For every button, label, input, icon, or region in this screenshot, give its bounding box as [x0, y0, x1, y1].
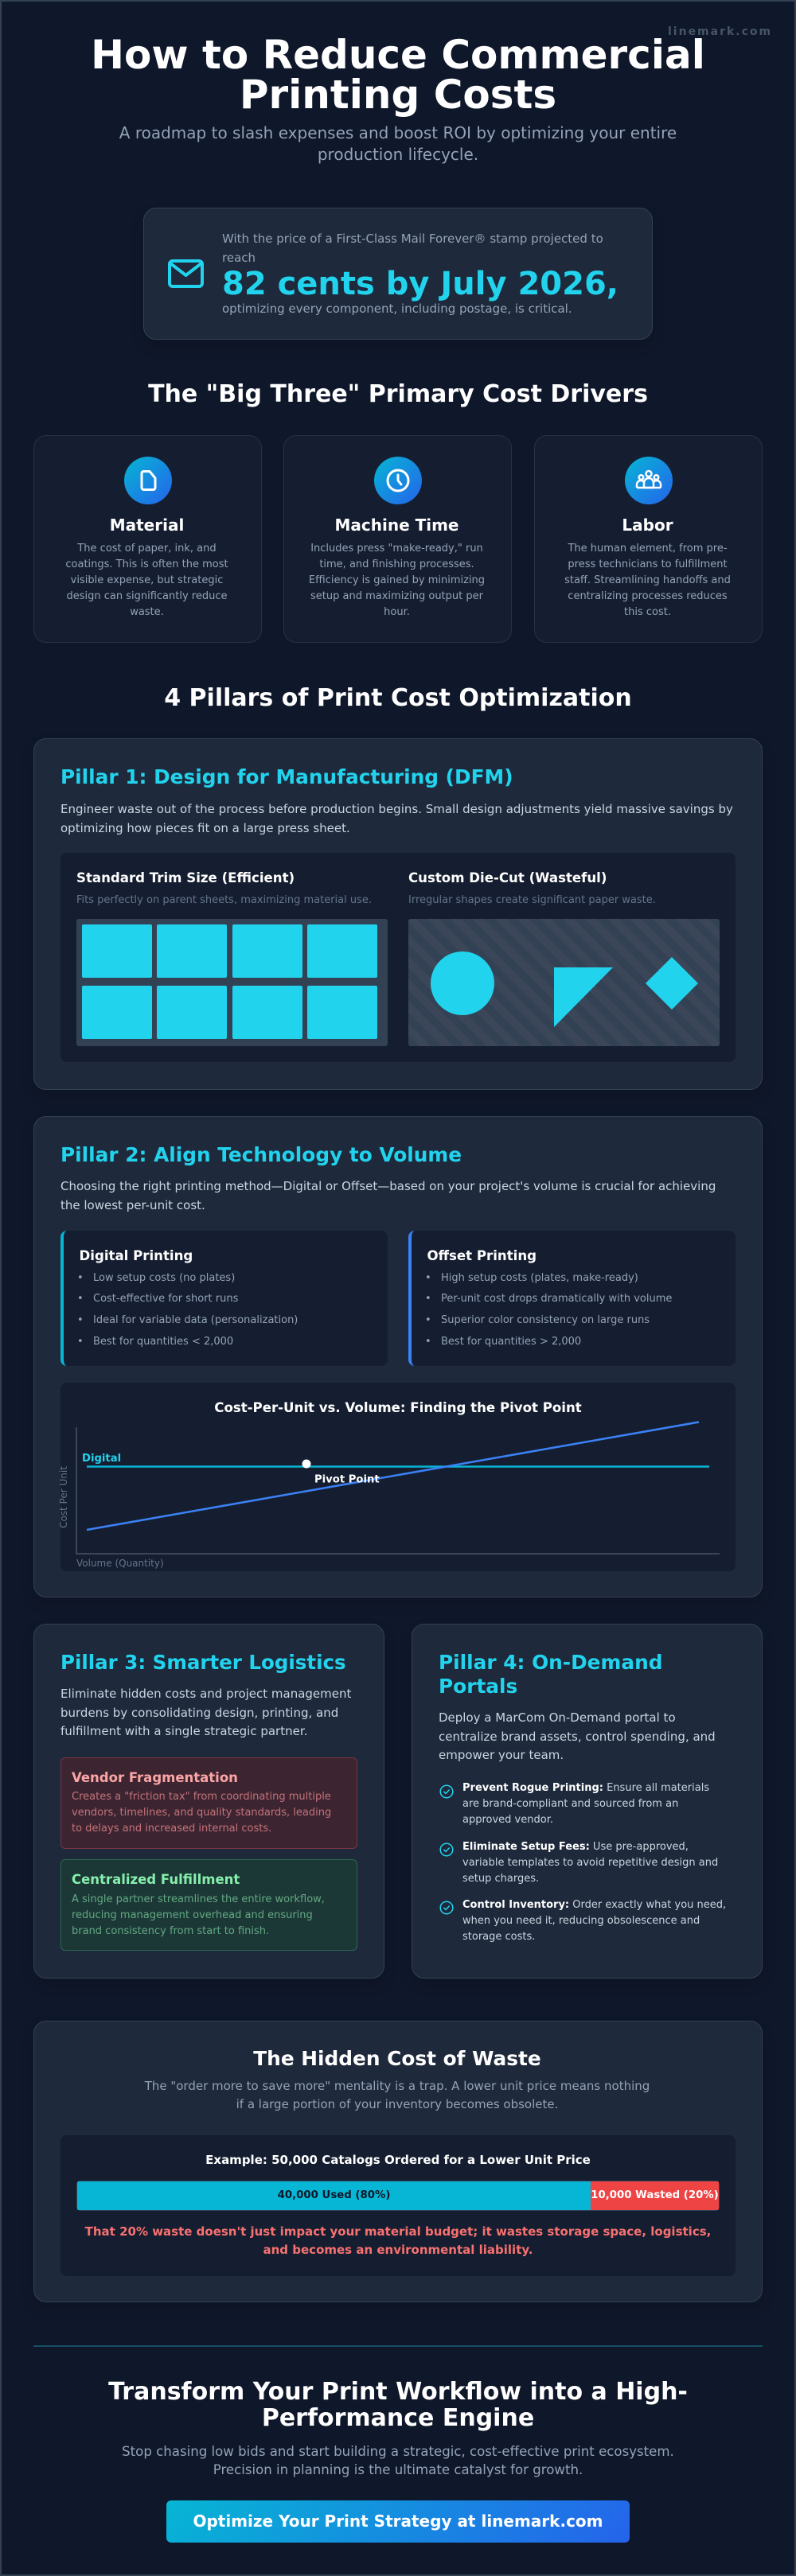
card text: press technicians to fulfillment [568, 558, 728, 570]
efficient press sheet [76, 919, 388, 1046]
digital bullets: • [77, 1336, 84, 1348]
card text: centralizing processes reduces [568, 590, 728, 602]
waste note: and becomes an environmental liability. [263, 2242, 533, 2256]
pillar 2 heading: Pillar 2: Align Technology to Volume [60, 1143, 462, 1166]
pillar 3 text [60, 1687, 352, 1738]
benefit: setup fees: Eliminate Setup Fees: Use pre-approved, [462, 1841, 689, 1853]
vendor text: vendors, timelines, and quality standards, leading [72, 1807, 331, 1819]
pillar 2 text: Choosing the right printing method—Digital or Offset—based on your project's volume is crucial for achieving [60, 1179, 716, 1193]
closing heading: Performance Engine [262, 2404, 534, 2431]
example title: Example: 50,000 Catalogs Ordered for a Lower Unit Price [205, 2153, 591, 2167]
vendor heading: Vendor Fragmentation [72, 1770, 238, 1785]
digital bullets: • [77, 1293, 84, 1305]
closing text: Precision in planning is the ultimate catalyst for growth. [213, 2462, 583, 2477]
benefit: rogue printing: Prevent Rogue Printing: Ensure all materials [462, 1782, 709, 1794]
offset list [441, 1272, 672, 1348]
card text: hour. [384, 606, 410, 618]
benefit: inventory [462, 1899, 726, 1943]
digital list [93, 1272, 298, 1348]
digital heading: Digital Printing [80, 1248, 193, 1263]
closing text: Stop chasing low bids and start building a strategic, cost-effective print ecosystem. [122, 2444, 674, 2459]
pillar 4 heading: Pillar 4: On-Demand [439, 1651, 662, 1674]
vendor text: to delays and increased internal costs. [72, 1823, 271, 1835]
fulfillment text [72, 1893, 325, 1937]
card title: Labor [622, 516, 673, 535]
pivot marker [302, 1459, 310, 1469]
call to action button [166, 2500, 630, 2543]
y axis label: Cost Per Unit [58, 1466, 69, 1528]
wasted segment: 10,000 Wasted (20%) [591, 2189, 719, 2201]
offset bullets [425, 1272, 431, 1348]
benefit: inventory: Control Inventory: Order exactly what you need, [462, 1899, 726, 1911]
benefit: inventory: when you need it, reducing obsolescence and [462, 1915, 700, 1927]
offset heading: Offset Printing [427, 1248, 537, 1263]
benefit: setup fees [462, 1841, 718, 1885]
fulfillment text: A single partner streamlines the entire workflow, [72, 1893, 325, 1905]
card: machine time [283, 435, 512, 643]
icon: check [439, 1843, 454, 1857]
pillar 3 text: fulfillment with a single strategic partner. [60, 1724, 307, 1738]
benefit: rogue printing: approved vendor. [462, 1814, 553, 1826]
heading: big three: The "Big Three" Primary Cost Drivers [148, 380, 648, 408]
wasteful press sheet [408, 919, 720, 1046]
waste note [84, 2224, 711, 2256]
card text: setup and maximizing output per [310, 590, 483, 602]
offset bullets: • [425, 1293, 431, 1305]
benefit: rogue printing: are brand-compliant and sourced from an [462, 1798, 678, 1810]
pillar 3 heading: Pillar 3: Smarter Logistics [60, 1651, 346, 1674]
offset bullets: • [425, 1272, 431, 1284]
fulfillment text: brand consistency from start to finish. [72, 1925, 269, 1937]
digital list: Best for quantities < 2,000 [93, 1336, 233, 1348]
chart title: Cost-Per-Unit vs. Volume: Finding the Pivot Point [214, 1400, 582, 1415]
icon: check [439, 1901, 454, 1914]
wasteful caption: Irregular shapes create significant paper waste. [408, 894, 656, 906]
offset list: Best for quantities > 2,000 [441, 1336, 581, 1348]
title: How to Reduce Commercial [91, 32, 705, 78]
waste text: The "order more to save more" mentality is a trap. A lower unit price means nothing [145, 2078, 650, 2092]
watermark: linemark.com [668, 25, 772, 38]
pillar 4 text: empower your team. [439, 1748, 564, 1762]
subtitle: production lifecycle. [318, 145, 478, 164]
panel: catalog example [60, 2135, 736, 2276]
pillar 1 heading: Pillar 1: Design for Manufacturing (DFM) [60, 765, 513, 788]
callout highlight: 82 cents by July 2026, [222, 266, 618, 302]
line chart: pivot point [60, 1383, 736, 1571]
card text: design can significantly reduce [66, 590, 228, 602]
panel: pillar 4 [412, 1624, 763, 1979]
pivot label: Pivot Point [314, 1473, 380, 1486]
waste text: if a large portion of your inventory becomes obsolete. [236, 2097, 558, 2111]
digital bullets: • [77, 1272, 84, 1284]
icon: check [439, 1785, 454, 1798]
card title: Machine Time [334, 516, 458, 535]
call to action button: Optimize Your Print Strategy at linemark.com [193, 2512, 603, 2531]
axes [76, 1427, 720, 1554]
callout lead text [222, 232, 603, 265]
card text: time, and finishing processes. [319, 558, 474, 570]
card text [309, 543, 485, 618]
panel: hidden cost of waste [33, 2021, 763, 2302]
offset bullets: • [425, 1314, 431, 1326]
closing text [122, 2444, 674, 2477]
card text: coatings. This is often the most [65, 558, 228, 570]
callout closing text: optimizing every component, including postage, is critical. [222, 302, 572, 316]
card text: staff. Streamlining handoffs and [564, 574, 731, 586]
benefit: setup fees: variable templates to avoid repetitive design and [462, 1857, 718, 1869]
pillar 4 heading: Portals [439, 1675, 517, 1698]
callout: vendor fragmentation [60, 1757, 357, 1849]
panel: offset printing [408, 1231, 736, 1366]
panel: digital printing [60, 1231, 388, 1366]
subtitle [119, 123, 677, 164]
title: Printing Costs [240, 72, 556, 118]
vendor text: Creates a "friction tax" from coordinating multiple [72, 1791, 331, 1803]
waste note: That 20% waste doesn't just impact your material budget; it wastes storage space, logistics, [85, 2224, 711, 2239]
card text [564, 543, 731, 618]
card text: The human element, from pre- [568, 543, 728, 555]
callout lead text: With the price of a First-Class Mail Forever® stamp projected to [222, 232, 603, 246]
pillar 3 text: Eliminate hidden costs and project management [60, 1687, 351, 1701]
card text [65, 543, 228, 618]
card text: waste. [130, 606, 164, 618]
waste heading: The Hidden Cost of Waste [253, 2047, 541, 2070]
pillar 3 text: burdens by consolidating design, printing, and [60, 1706, 338, 1720]
digital bullets: • [77, 1314, 84, 1326]
panel: pillar 2 [33, 1116, 763, 1597]
subtitle: A roadmap to slash expenses and boost ROI by optimizing your entire [119, 123, 677, 142]
panel: pillar 1 [33, 738, 763, 1090]
icon: people [624, 457, 672, 504]
divider [33, 2345, 763, 2347]
x axis label: Volume (Quantity) [76, 1558, 164, 1569]
card text: Efficiency is gained by minimizing [309, 574, 485, 586]
digital list: Cost-effective for short runs [93, 1293, 238, 1305]
card: labor [534, 435, 763, 643]
callout lead text: reach [222, 251, 256, 265]
offset list: Per-unit cost drops dramatically with volume [441, 1293, 672, 1305]
digital list: Low setup costs (no plates) [93, 1272, 235, 1284]
pillar 2 text: the lowest per-unit cost. [60, 1198, 205, 1212]
pillar 1 text: Engineer waste out of the process before production begins. Small design adjustments yield massive savings by [60, 802, 733, 816]
benefit: setup fees: setup charges. [462, 1873, 539, 1885]
wasted segment [591, 2181, 719, 2210]
pillar 4 heading [439, 1651, 662, 1698]
title [91, 32, 705, 118]
pillar 1 text [60, 802, 733, 835]
offset list: High setup costs (plates, make-ready) [441, 1272, 638, 1284]
callout: stamp price [143, 208, 653, 340]
benefit: rogue printing [462, 1782, 709, 1826]
pillar 4 text: Deploy a MarCom On-Demand portal to [439, 1710, 676, 1725]
card: material [33, 435, 262, 643]
closing heading [108, 2377, 688, 2431]
used segment: 40,000 Used (80%) [278, 2189, 390, 2201]
wasteful heading: Custom Die-Cut (Wasteful) [408, 870, 607, 885]
digital line [87, 1465, 709, 1468]
panel: pillar 3 [33, 1624, 384, 1979]
icon: document [124, 457, 172, 504]
used segment [77, 2181, 591, 2210]
fulfillment heading: Centralized Fulfillment [72, 1872, 240, 1887]
efficient caption: Fits perfectly on parent sheets, maximizing material use. [76, 894, 372, 906]
fulfillment text: reducing management overhead and ensuring [72, 1909, 313, 1921]
card title: Material [110, 516, 184, 535]
efficient heading: Standard Trim Size (Efficient) [76, 870, 295, 885]
icon: envelope [168, 259, 204, 288]
callout: centralized fulfillment [60, 1859, 357, 1951]
card text: visible expense, but strategic [71, 574, 223, 586]
stacked bar [76, 2181, 720, 2211]
card text: Includes press "make-ready," run [310, 543, 483, 555]
benefit: inventory: storage costs. [462, 1931, 535, 1943]
offset bullets: • [425, 1336, 431, 1348]
pillar 2 text [60, 1179, 716, 1212]
digital list: Ideal for variable data (personalization) [93, 1314, 298, 1326]
panel: layout comparison [60, 853, 736, 1062]
pillar 4 text [439, 1710, 716, 1762]
closing heading: Transform Your Print Workflow into a High- [108, 2377, 688, 2406]
offset list: Superior color consistency on large runs [441, 1314, 650, 1326]
digital bullets [77, 1272, 84, 1348]
offset line [87, 1422, 699, 1530]
card text: this cost. [624, 606, 671, 618]
pillar 4 text: centralize brand assets, control spending, and [439, 1730, 716, 1744]
vendor text [72, 1791, 331, 1835]
icon: clock [374, 457, 422, 504]
pillar 1 text: optimizing how pieces fit on a large press sheet. [60, 821, 350, 835]
waste text [145, 2078, 650, 2111]
digital label: Digital [82, 1453, 121, 1465]
heading: four pillars: 4 Pillars of Print Cost Optimization [164, 684, 632, 712]
card text: The cost of paper, ink, and [77, 543, 217, 555]
